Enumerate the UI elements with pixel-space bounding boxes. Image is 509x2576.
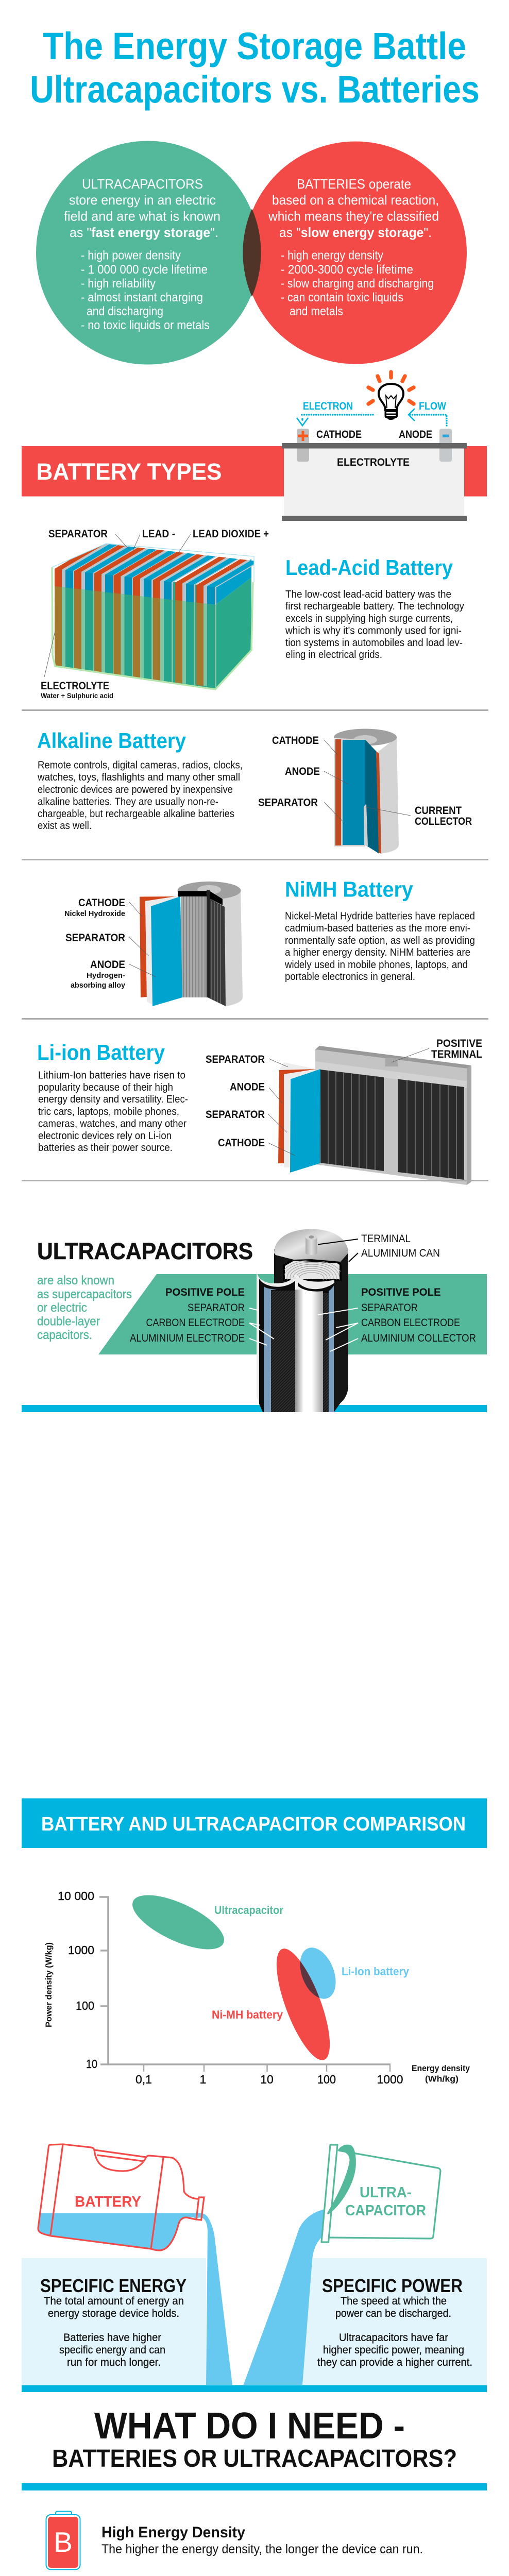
text block: specific power description	[317, 2295, 472, 2368]
list: ultracapacitor properties: - almost instant charging	[81, 291, 203, 304]
data ellipse: ni-mh battery	[266, 1943, 341, 2066]
labels: alkaline parts: COLLECTOR	[415, 816, 472, 827]
illustration: NiMH cell cutaway	[140, 882, 243, 1006]
list: ultracapacitor properties: and discharging	[87, 304, 163, 318]
text block: ultracapacitors definition: store energy in an electric	[69, 192, 216, 208]
electron flow arrows	[297, 409, 447, 428]
text block: specific power description: they can provide a higher current.	[317, 2357, 472, 2368]
text block: ultracapacitors definition: ULTRACAPACITORS	[82, 176, 203, 192]
jug label: BATTERY	[75, 2194, 141, 2210]
row: high energy density	[46, 2511, 423, 2570]
leader lines: li-ion	[268, 1048, 429, 1156]
battery labels	[316, 429, 432, 468]
leader lines: NiMH	[129, 902, 156, 977]
text block: li-ion description: tric cars, laptops, mobile phones,	[38, 1106, 179, 1117]
data ellipse: li-ion battery	[293, 1942, 343, 2004]
y axis values: 100	[76, 1999, 94, 2012]
labels: li-ion parts: SEPARATOR	[206, 1054, 265, 1065]
chart: ragone plot of power density against energy density	[44, 1884, 470, 2086]
divider	[22, 1180, 488, 1181]
series labels: Ultracapacitor	[214, 1904, 283, 1917]
banner: battery and ultracapacitor comparison: BATTERY AND ULTRACAPACITOR COMPARISON	[41, 1814, 466, 1835]
series labels	[212, 1904, 410, 2021]
text block: alkaline description	[37, 759, 243, 832]
labels: NiMH parts: CATHODE	[78, 897, 125, 909]
battery labels: ANODE	[399, 429, 432, 440]
text block: also known as: capacitors.	[37, 1328, 92, 1342]
list: battery properties: and metals	[290, 304, 343, 318]
text block: also known as: or electric	[37, 1301, 87, 1315]
data ellipse overlap	[300, 1961, 319, 1998]
labels: NiMH parts: ANODE	[90, 959, 125, 971]
text block: li-ion description	[38, 1070, 188, 1154]
light rays	[368, 372, 414, 404]
labels: capacitor left side: ALUMINIUM ELECTRODE	[130, 1332, 245, 1344]
y axis values	[58, 1889, 97, 2071]
panel: specific power background	[302, 2258, 487, 2385]
x axis title	[412, 2063, 470, 2084]
list: ultracapacitor properties: - no toxic liquids or metals	[81, 318, 210, 332]
icon: light bulb	[379, 384, 403, 420]
labels: capacitor right side: TERMINAL	[361, 1233, 411, 1245]
blue divider bar	[22, 2483, 487, 2490]
text block: lead-acid description: first rechargeable battery. The technology	[285, 601, 464, 612]
text block: NiMH description: a higher energy density. NiHM batteries are	[285, 947, 470, 958]
divider	[22, 859, 488, 860]
text block: li-ion description: energy density and versatility. Elec-	[38, 1094, 188, 1105]
list: ultracapacitor properties: - high reliability	[81, 277, 156, 291]
battery labels: CATHODE	[316, 429, 362, 440]
x axis title: (Wh/kg)	[425, 2074, 459, 2084]
bucket label	[345, 2184, 426, 2219]
circle overlap	[243, 209, 261, 297]
text block: li-ion description: popularity because of their high	[38, 1082, 173, 1093]
section: NiMH battery	[64, 877, 475, 1006]
heading: specific energy: SPECIFIC ENERGY	[40, 2275, 186, 2296]
battery diagram with electron flow	[282, 372, 467, 521]
text block: also known as: are also known	[37, 1274, 114, 1287]
x axis title: Energy density	[412, 2063, 470, 2073]
bucket label: CAPACITOR	[345, 2202, 426, 2219]
text block: also known as: as supercapacitors	[37, 1287, 132, 1301]
labels: alkaline parts: SEPARATOR	[258, 796, 318, 809]
heading: specific power: SPECIFIC POWER	[322, 2275, 463, 2296]
illustration: ultracapacitor cutaway	[257, 1229, 348, 1412]
leader lines: alkaline	[324, 740, 411, 821]
text block: batteries definition: which means they're classified	[268, 208, 439, 224]
heading: High Energy Density	[101, 2524, 245, 2541]
electron flow label: FLOW	[419, 400, 446, 412]
bucket label: ULTRA-	[360, 2184, 412, 2201]
text block: batteries definition: as "slow energy storage".	[279, 225, 432, 240]
heading: what do I need	[52, 2405, 457, 2472]
labels: capacitor right side	[361, 1233, 476, 1344]
water in battery jug with stream	[38, 2213, 232, 2385]
y axis values: 1000	[68, 1943, 94, 1957]
x axis values: 0,1	[135, 2073, 152, 2086]
x axis values: 100	[317, 2073, 336, 2086]
text block: lead-acid description: excels in supplying high surge currents,	[285, 613, 453, 624]
labels: NiMH parts	[64, 897, 126, 990]
text block: ultracapacitors definition: as "fast energy storage".	[70, 225, 218, 240]
labels: capacitor left side	[130, 1286, 245, 1344]
heading: alkaline battery: Alkaline Battery	[37, 728, 186, 753]
heading: ultracapacitors: ULTRACAPACITORS	[37, 1238, 253, 1264]
banner: battery and ultracapacitor comparison	[22, 1798, 487, 1848]
text block: also known as: double-layer	[37, 1315, 100, 1328]
heading: NiMH battery: NiMH Battery	[285, 877, 414, 902]
x axis values	[135, 2073, 403, 2086]
section: specific energy and specific power	[22, 2144, 487, 2392]
title	[30, 25, 480, 111]
text block: ultracapacitors definition	[64, 176, 220, 240]
labels: capacitor left side: CARBON ELECTRODE	[146, 1317, 245, 1329]
venn diagram: ultracapacitors and batteries	[36, 141, 467, 365]
section: ultracapacitors	[22, 1229, 487, 1412]
labels: capacitor right side: SEPARATOR	[361, 1302, 418, 1314]
text block: lead-acid description: tion systems in automobiles and load lev-	[285, 637, 463, 649]
list: battery properties: - high energy density	[281, 248, 383, 263]
panel: specific energy background	[22, 2258, 206, 2385]
text block: alkaline description: chargeable, but rechargeable alkaline batteries	[38, 808, 234, 820]
labels: lead-acid parts: SEPARATOR	[48, 528, 108, 540]
y axis values: 10 000	[58, 1889, 94, 1903]
electron flow label: ELECTRON	[303, 400, 353, 412]
text block: li-ion description: cameras, watches, and many other	[38, 1118, 186, 1129]
terminals	[297, 429, 452, 462]
text block: alkaline description: electronic devices are powered by inexpensive	[38, 784, 233, 795]
labels: li-ion parts: CATHODE	[218, 1137, 265, 1149]
chart axes	[99, 1897, 391, 2072]
labels: NiMH parts: Nickel Hydroxide	[64, 909, 125, 918]
banner: battery types: BATTERY TYPES	[36, 459, 222, 485]
divider	[22, 1018, 488, 1020]
list: battery properties: - slow charging and discharging	[281, 277, 434, 291]
y axis title: Power density (W/kg)	[44, 1942, 54, 2027]
labels: NiMH parts: SEPARATOR	[65, 932, 125, 944]
panel: ultracapacitors circle	[36, 141, 260, 365]
text block: specific energy description	[44, 2295, 184, 2368]
blue base bar	[22, 2385, 487, 2392]
x axis values: 10	[260, 2073, 274, 2086]
text block: lead-acid description: eling in electrical grids.	[285, 649, 382, 660]
text block: NiMH description: ronmentally safe option, as well as providing	[285, 935, 475, 946]
lid and base bars	[282, 443, 467, 521]
divider	[22, 709, 488, 711]
labels: li-ion parts	[206, 1038, 482, 1149]
electron flow label	[303, 400, 446, 412]
series labels: Ni-MH battery	[212, 2008, 283, 2021]
panel: batteries circle	[244, 141, 467, 364]
icon: battery B: B	[54, 2526, 73, 2558]
labels: lead-acid parts: ELECTROLYTE	[41, 680, 109, 692]
list: battery properties: - can contain toxic liquids	[281, 291, 403, 304]
series labels: Li-Ion battery	[342, 1965, 410, 1978]
text block: NiMH description: widely used in mobile phones, laptops, and	[284, 959, 468, 971]
text block: alkaline description: watches, toys, flashlights and many other small	[37, 772, 240, 783]
list: ultracapacitor properties	[81, 248, 210, 332]
text block: specific energy description: energy storage device holds.	[48, 2308, 179, 2319]
banner: battery types	[22, 446, 487, 497]
panel: green label background	[98, 1274, 487, 1354]
text block: specific energy description: The total amount of energy an	[44, 2295, 184, 2307]
text block: specific power description: Ultracapacitors have far	[339, 2332, 448, 2344]
text block: lead-acid description: which is why it's commonly used for igni-	[285, 625, 462, 637]
title: The Energy Storage Battle	[43, 25, 466, 67]
labels: lead-acid parts: LEAD -	[142, 528, 175, 540]
text block: batteries definition: based on a chemical reaction,	[272, 192, 439, 208]
text block: NiMH description	[284, 911, 475, 982]
list: battery properties	[281, 248, 434, 318]
x axis values: 1	[200, 2073, 206, 2086]
y axis values: 10	[86, 2057, 97, 2071]
text block: specific energy description: Batteries have higher	[63, 2332, 161, 2344]
text block: alkaline description: alkaline batteries. They are usually non-re-	[38, 796, 218, 807]
heading: what do I need: WHAT DO I NEED -	[94, 2405, 405, 2447]
text block: specific energy description: run for much longer.	[67, 2357, 161, 2368]
labels: lead-acid parts: Water + Sulphuric acid	[41, 691, 113, 700]
leader lines: lead-acid	[44, 534, 191, 677]
labels: capacitor right side: CARBON ELECTRODE	[361, 1317, 460, 1329]
labels: alkaline parts	[258, 735, 472, 827]
blue base bar	[22, 1405, 487, 1412]
heading: li-ion battery: Li-ion Battery	[37, 1040, 165, 1064]
text block: alkaline description: Remote controls, digital cameras, radios, clocks,	[38, 759, 243, 771]
list: ultracapacitor properties: - high power density	[81, 248, 181, 263]
heading: lead-acid battery: Lead-Acid Battery	[285, 555, 453, 580]
leader lines: capacitor	[249, 1239, 358, 1351]
icon: ultracapacitor bucket	[321, 2145, 440, 2242]
labels: lead-acid parts	[41, 528, 269, 700]
section: alkaline battery	[37, 728, 472, 854]
labels: alkaline parts: CATHODE	[272, 735, 319, 747]
labels: capacitor right side: ALUMINIUM COLLECTOR	[361, 1332, 476, 1344]
labels: li-ion parts: TERMINAL	[431, 1048, 482, 1060]
text block: ultracapacitors definition: field and are what is known	[64, 208, 220, 224]
text block: batteries definition: BATTERIES operate	[297, 176, 411, 192]
labels: NiMH parts: Hydrogen-	[87, 971, 125, 980]
labels: capacitor left side: POSITIVE POLE	[165, 1286, 245, 1298]
text block: li-ion description: batteries as their power source.	[38, 1142, 173, 1154]
text block: NiMH description: cadmium-based batteries as the more envi-	[285, 923, 470, 934]
text block: li-ion description: Lithium-Ion batteries have risen to	[38, 1070, 185, 1081]
body text: The higher the energy density, the longer the device can run.	[101, 2542, 423, 2556]
icon: battery jug	[38, 2144, 204, 2250]
text block: li-ion description: electronic devices rely on Li-ion	[38, 1130, 172, 1142]
text block: NiMH description: portable electronics in general.	[285, 971, 415, 982]
labels: capacitor left side: SEPARATOR	[188, 1302, 245, 1314]
illustration: alkaline cell cutaway	[334, 728, 399, 854]
icon: battery B	[46, 2511, 80, 2570]
heading: what do I need: BATTERIES OR ULTRACAPACITORS?	[52, 2445, 457, 2472]
text block: batteries definition	[268, 176, 439, 240]
labels: alkaline parts: CURRENT	[415, 805, 462, 817]
battery labels: ELECTROLYTE	[337, 456, 410, 468]
water stream from ultracapacitor bucket	[243, 2209, 325, 2385]
list: battery properties: - 2000-3000 cycle lifetime	[281, 263, 413, 277]
illustration: li-ion pouch cell	[278, 1046, 471, 1185]
text block: lead-acid description	[285, 589, 464, 660]
text block: specific energy description: specific energy and can	[59, 2344, 165, 2356]
labels: capacitor right side: ALUMINIUM CAN	[361, 1247, 440, 1259]
labels: li-ion parts: POSITIVE	[436, 1038, 482, 1049]
labels: NiMH parts: absorbing alloy	[71, 981, 126, 990]
labels: capacitor right side: POSITIVE POLE	[361, 1286, 441, 1298]
x axis values: 1000	[377, 2073, 403, 2086]
labels: li-ion parts: SEPARATOR	[206, 1109, 265, 1121]
text block: specific power description: higher specific power, meaning	[323, 2344, 464, 2356]
illustration: lead-acid cell	[52, 538, 260, 692]
text block: alkaline description: exist as well.	[38, 820, 92, 832]
text block: also known as	[37, 1274, 132, 1342]
labels: li-ion parts: ANODE	[230, 1081, 265, 1093]
battery body	[284, 448, 464, 516]
text block: specific power description: The speed at which the	[341, 2295, 447, 2307]
section: lead-acid battery	[41, 528, 464, 700]
labels: alkaline parts: ANODE	[285, 766, 320, 777]
text block: lead-acid description: The low-cost lead-acid battery was the	[285, 589, 451, 600]
text block: specific power description: power can be discharged.	[335, 2308, 451, 2319]
section: li-ion battery	[37, 1038, 482, 1185]
data ellipse: ultracapacitor	[125, 1884, 231, 1960]
list: ultracapacitor properties: - 1 000 000 cycle lifetime	[81, 263, 208, 277]
labels: lead-acid parts: LEAD DIOXIDE +	[193, 528, 269, 540]
text block: NiMH description: Nickel-Metal Hydride batteries have replaced	[285, 911, 475, 922]
